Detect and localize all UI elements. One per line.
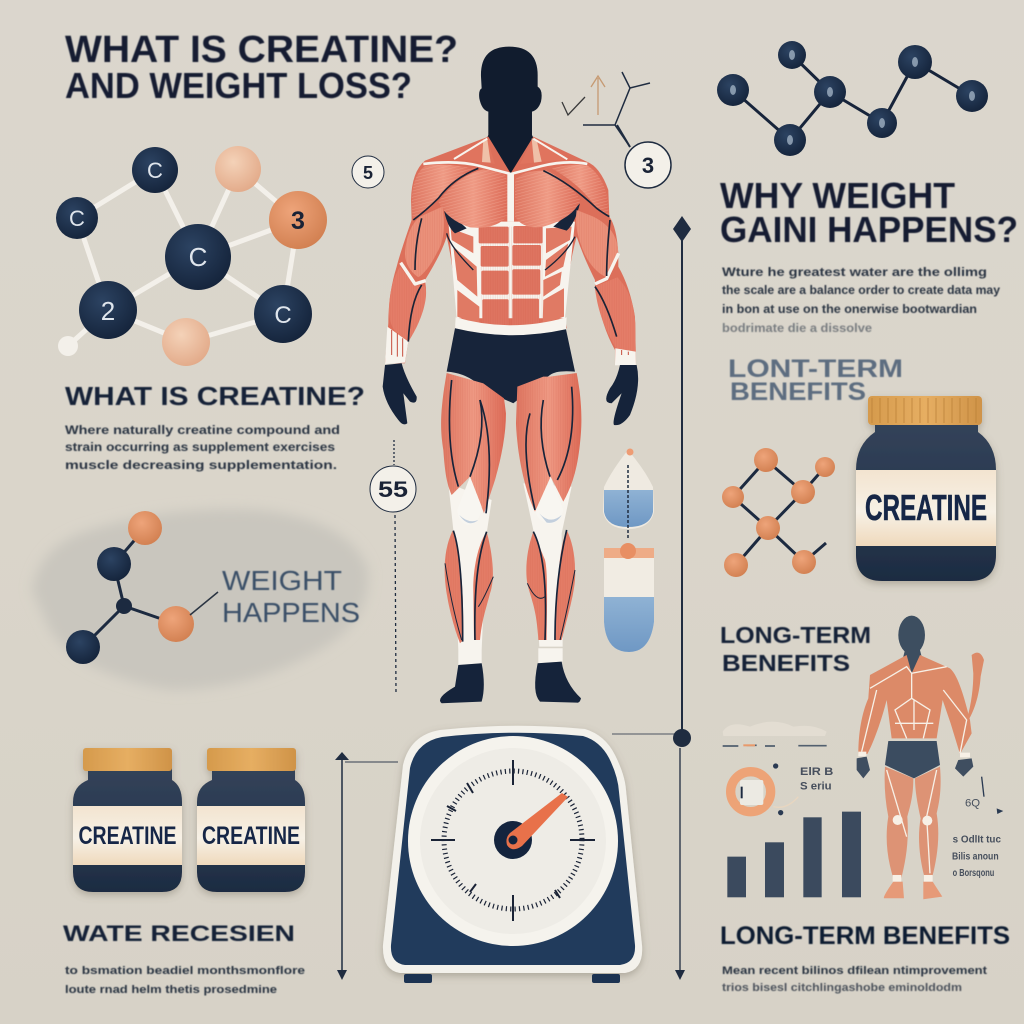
bar chart [727, 812, 861, 897]
dial [408, 736, 618, 946]
lower body [440, 373, 581, 703]
heading: water retention: WATE RECESIEN [63, 921, 295, 946]
molecule: creatine structure: C [189, 242, 207, 272]
heading: why weight gain happens [720, 175, 1018, 250]
ankles [458, 648, 563, 665]
title: WHAT IS CREATINE? [65, 29, 458, 71]
leg underlay [448, 483, 572, 650]
text block: why weight gain: Wture he greatest water are the ollimg [722, 267, 987, 279]
text block: water retention: loute rnad helm thetis prosedmine [65, 984, 277, 996]
heading: long-term benefits: BENEFITS [722, 650, 850, 676]
pectorals [438, 169, 581, 228]
muscle lines [445, 380, 575, 642]
ring icon [731, 763, 798, 815]
waistband [455, 317, 567, 335]
small annotations and bar chart [723, 616, 1003, 899]
icon: water bags [603, 448, 654, 652]
molecule: creatine structure: C [69, 206, 85, 231]
molecule: top right [717, 41, 988, 156]
small chart sketch [562, 72, 650, 147]
heading: weight happens: HAPPENS [222, 597, 360, 628]
number badge: 55: 55 [378, 477, 408, 502]
heading: why weight gain happens: GAINI HAPPENS? [720, 209, 1018, 250]
side notes: 6Q [965, 798, 980, 810]
heading: why weight gain happens: WHY WEIGHT [720, 175, 955, 216]
panel: weight happens blob [32, 509, 368, 690]
number badge: 3 [617, 125, 671, 188]
text block: why weight gain: the scale are a balance order to create data may [722, 285, 1001, 297]
molecule: creatine structure: C [147, 158, 163, 183]
thighs [441, 373, 506, 513]
molecule: creatine structure [56, 146, 327, 366]
text block: long-term benefits: Mean recent bilinos dfilean ntimprovement [722, 965, 987, 977]
side notes: o Borsqonu [953, 868, 994, 879]
number badge: 5: 5 [363, 163, 373, 183]
molecule: weight happens [66, 511, 218, 664]
side notes: s OdlIt tuc [953, 835, 1001, 846]
text block: creatine description: muscle decreasing supplementation. [65, 460, 337, 472]
title [65, 29, 458, 106]
abdominal base [448, 222, 575, 318]
molecule: creatine structure: 2 [101, 296, 115, 326]
text block: why weight gain: in bon at use on the onerwise bootwardian [722, 304, 977, 316]
athlete figure [857, 616, 984, 899]
dial hub [494, 821, 532, 859]
head and neck [479, 47, 542, 173]
icon: weight scale [383, 726, 642, 983]
icon: creatine jar right [197, 748, 305, 892]
note text: S eriu [800, 780, 832, 792]
text block: why weight gain [722, 267, 1001, 335]
heading: long-term benefits [720, 622, 871, 676]
heading: long-term benefits faded [728, 355, 903, 406]
forearms [389, 267, 426, 342]
feet [440, 663, 484, 703]
icon: creatine jar left [73, 748, 182, 892]
deltoids [412, 165, 475, 218]
heading: long-term benefits faded: LONT-TERM [728, 355, 903, 383]
icon: creatine jar right: CREATINE [202, 822, 300, 850]
heading: long-term benefits faded: BENEFITS [730, 378, 866, 406]
upper body [383, 47, 638, 425]
white muscle bands [401, 139, 619, 284]
sketch marks [723, 722, 827, 746]
heading: long-term benefits main: LONG-TERM BENEFITS [720, 922, 1010, 950]
heading: weight happens [222, 565, 360, 628]
side notes: Bilis anoun [952, 851, 999, 862]
connector lines [335, 216, 691, 980]
text block: creatine description: Where naturally creatine compound and [65, 425, 340, 437]
hands [383, 363, 417, 424]
icon: creatine jar left: CREATINE [78, 822, 176, 850]
heading: weight happens: WEIGHT [222, 565, 342, 596]
text block: creatine description [65, 425, 340, 472]
side notes [952, 777, 1003, 879]
abdominal blocks [479, 226, 543, 329]
needle [506, 793, 568, 849]
torso and arm silhouette [385, 137, 636, 365]
text block: long-term benefits: trios bisesl citchlingashobe eminoldodm [722, 982, 962, 994]
heading: what is creatine: WHAT IS CREATINE? [65, 381, 365, 411]
shorts [447, 328, 575, 403]
trapezius [454, 139, 567, 164]
under-chest shadow [443, 203, 580, 233]
side abdominals [451, 227, 572, 325]
number badge: 55 [370, 466, 416, 512]
molecule: orange nodes [722, 448, 835, 577]
number badge: 3: 3 [642, 153, 654, 178]
text block: water retention: to bsmation beadiel monthsmonflore [65, 965, 305, 977]
body figure: muscular anatomy [383, 47, 638, 703]
title: AND WEIGHT LOSS? [65, 65, 412, 106]
biceps [405, 207, 444, 277]
knees [457, 477, 563, 525]
heading: long-term benefits: LONG-TERM [720, 622, 871, 648]
text block: why weight gain: bodrimate die a dissolve [722, 323, 872, 335]
note text: ElR B [800, 766, 833, 778]
note text [800, 766, 833, 792]
text block: creatine description: strain occurring as supplement exercises [65, 442, 335, 454]
wrists [385, 327, 636, 365]
text block: water retention [65, 965, 305, 996]
dial ticks [431, 760, 595, 921]
muscle outlines [408, 168, 617, 342]
molecule: creatine structure: C [274, 302, 292, 329]
calves [445, 530, 575, 643]
icon: large creatine jar [856, 396, 996, 581]
number badge: 5 [352, 156, 384, 188]
text block: long-term benefits [722, 965, 987, 994]
molecule: creatine structure: 3 [291, 207, 305, 235]
